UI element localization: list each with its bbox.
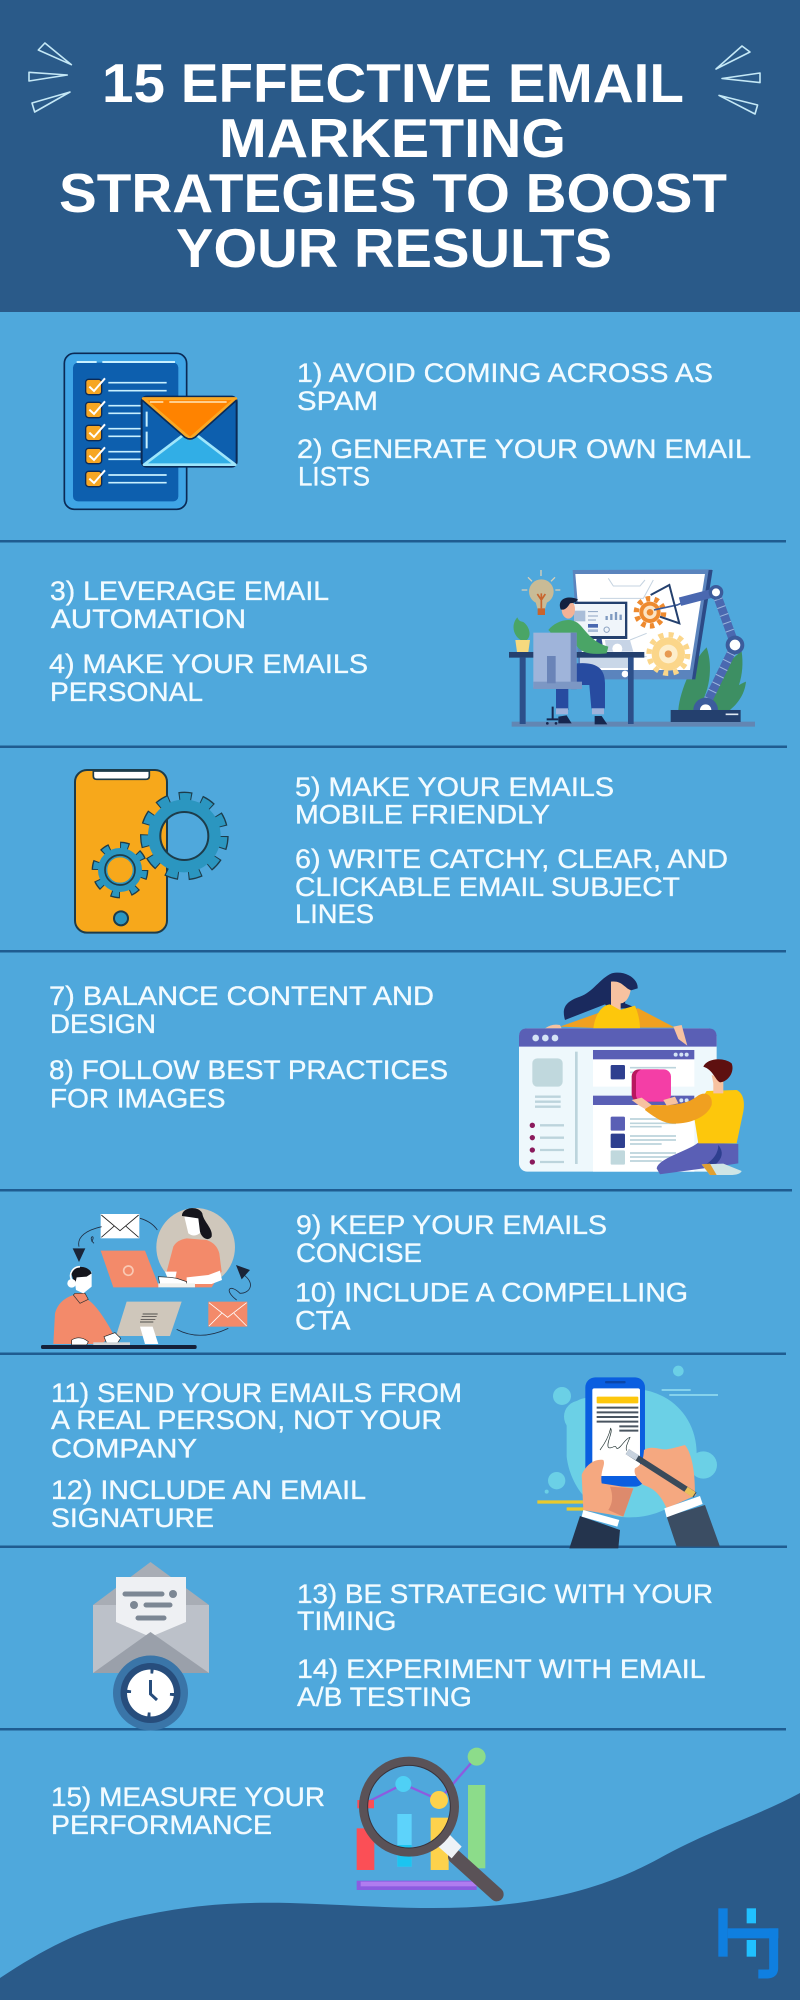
title (59, 52, 727, 279)
text: strategy 15 (51, 1782, 325, 1840)
text: strategies 9 and 10: CONCISE (296, 1238, 422, 1268)
icon: two people exchanging email (41, 1208, 250, 1349)
text: strategies 13 and 14 (297, 1579, 713, 1712)
icon: left burst rays (29, 43, 71, 112)
panel: strategies 5 and 6 (75, 770, 728, 933)
text: strategies 5 and 6: CLICKABLE EMAIL SUBJECT (295, 872, 680, 902)
panel: strategies 13 and 14 (93, 1562, 713, 1730)
text: strategies 11 and 12: SIGNATURE (51, 1503, 214, 1533)
text: strategies 3 and 4: AUTOMATION (51, 604, 246, 634)
text: strategies 11 and 12: COMPANY (51, 1434, 197, 1464)
text: strategies 7 and 8: FOR IMAGES (50, 1084, 226, 1114)
logo: HJ monogram (718, 1908, 778, 1974)
text: strategies 3 and 4: PERSONAL (50, 677, 203, 707)
text: strategies 7 and 8: DESIGN (50, 1009, 156, 1039)
panel: strategies 9 and 10 (41, 1208, 688, 1349)
text: strategies 11 and 12: 12) INCLUDE AN EMAIL (51, 1475, 366, 1505)
bottom wave (0, 1793, 800, 2000)
text: strategies 9 and 10: 9) KEEP YOUR EMAILS (296, 1210, 607, 1240)
text: strategies 5 and 6 (295, 772, 728, 929)
title: YOUR RESULTS (176, 217, 612, 279)
text: strategies 1 and 2: 2) GENERATE YOUR OWN EMAIL (297, 434, 751, 464)
icon: open envelope with clock (93, 1562, 209, 1730)
text: strategies 1 and 2: LISTS (298, 462, 370, 492)
icon: people arranging a web page (519, 973, 744, 1175)
text: strategies 5 and 6: 6) WRITE CATCHY, CLEAR, AND (295, 844, 728, 874)
text: strategies 5 and 6: 5) MAKE YOUR EMAILS (295, 772, 614, 802)
title: STRATEGIES TO BOOST (59, 162, 727, 224)
panel: strategies 1 and 2 (64, 353, 751, 509)
title: MARKETING (219, 107, 566, 169)
text: strategies 7 and 8: 7) BALANCE CONTENT AND (49, 981, 434, 1011)
panel: strategies 3 and 4 (49, 569, 755, 727)
text: strategies 3 and 4 (49, 576, 368, 707)
title: 15 EFFECTIVE EMAIL (102, 52, 684, 114)
text: strategies 3 and 4: 4) MAKE YOUR EMAILS (49, 649, 368, 679)
text: strategies 13 and 14: A/B TESTING (297, 1682, 472, 1712)
icon: bar chart with magnifying glass (357, 1748, 497, 1894)
panel: strategies 11 and 12 (51, 1366, 720, 1548)
text: strategies 7 and 8: 8) FOLLOW BEST PRACTICES (49, 1055, 448, 1085)
text: strategies 13 and 14: 14) EXPERIMENT WITH EMAIL (297, 1654, 706, 1684)
text: strategies 1 and 2 (297, 358, 751, 492)
panel: strategies 7 and 8 (49, 973, 744, 1175)
text: strategies 3 and 4: 3) LEVERAGE EMAIL (50, 576, 329, 606)
icon: phone with gears (75, 770, 223, 933)
text: strategies 1 and 2: SPAM (297, 386, 378, 416)
panel: strategy 15 (51, 1748, 497, 1894)
text: strategy 15: 15) MEASURE YOUR (51, 1782, 325, 1812)
header band (0, 0, 800, 312)
icon: hands signing on a phone (537, 1366, 720, 1548)
text: strategies 9 and 10: CTA (295, 1306, 350, 1336)
text: strategies 1 and 2: 1) AVOID COMING ACROSS AS (297, 358, 713, 388)
text: strategies 7 and 8 (49, 981, 448, 1114)
text: strategies 11 and 12: 11) SEND YOUR EMAILS FROM (51, 1378, 462, 1408)
text: strategies 5 and 6: LINES (295, 899, 374, 929)
text: strategies 9 and 10 (295, 1210, 688, 1336)
icon: checklist and envelope (64, 353, 237, 509)
text: strategies 13 and 14: TIMING (297, 1606, 396, 1636)
icon: man at desk with robot arm (509, 569, 755, 727)
icon: right burst rays (716, 46, 760, 114)
text: strategy 15: PERFORMANCE (51, 1810, 272, 1840)
text: strategies 11 and 12: A REAL PERSON, NOT YOUR (51, 1405, 442, 1435)
text: strategies 9 and 10: 10) INCLUDE A COMPELLING (295, 1278, 688, 1308)
text: strategies 13 and 14: 13) BE STRATEGIC WITH YOUR (297, 1579, 713, 1609)
text: strategies 5 and 6: MOBILE FRIENDLY (295, 800, 550, 830)
text: strategies 11 and 12 (51, 1378, 462, 1533)
